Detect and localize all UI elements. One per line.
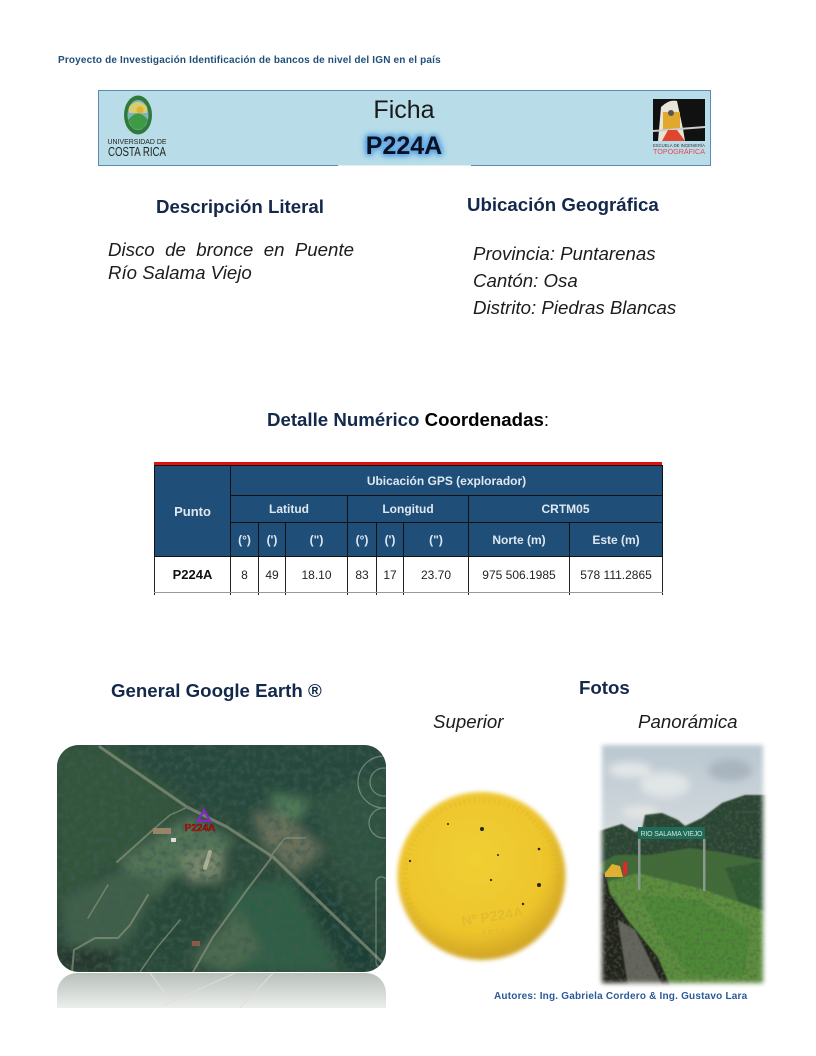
- heading: Ficha: Ficha: [373, 96, 435, 124]
- heading: Ubicación Geográfica: Ubicación Geográfica: [467, 194, 659, 215]
- heading: numeric detail: Detalle Numérico Coordenadas:: [267, 409, 549, 430]
- caption: Superior: Superior: [433, 711, 504, 732]
- table header rows: ("): [310, 532, 323, 546]
- heading: P224A: P224A: [366, 132, 442, 160]
- table data row: 17: [383, 568, 397, 582]
- authors credit: Autores: Ing. Gabriela Cordero & Ing. Gustavo Lara: [494, 991, 747, 1002]
- table data row: 83: [355, 568, 369, 582]
- table header rows: Punto: [174, 504, 211, 518]
- table header rows: (°): [238, 532, 251, 546]
- text block: literal description: [108, 239, 354, 283]
- map control rings: [357, 756, 386, 967]
- table data row: 23.70: [421, 568, 451, 582]
- text block: geographic location: [473, 243, 676, 318]
- table header rows: Norte (m): [492, 532, 546, 546]
- table header rows: ('): [267, 532, 277, 546]
- table header rows: ("): [429, 532, 443, 546]
- road sign: [638, 827, 706, 891]
- icon: Escuela de Topografía logo: TOPOGRÁFICA: [653, 147, 705, 156]
- text block: geographic location: Distrito: Piedras Blancas: [473, 297, 676, 318]
- title banner: [98, 90, 711, 166]
- running header: Proyecto de Investigación Identificación de bancos de nivel del IGN en el país: [58, 55, 441, 66]
- map marker P224A: [185, 810, 215, 834]
- photo: panoramic roadside view: [598, 742, 767, 987]
- table data row: 578 111.2865: [580, 568, 652, 582]
- icon: Escuela de Topografía logo: [653, 99, 705, 156]
- table header rows: ('): [385, 532, 395, 546]
- photo: bronze disc top view: 1974: [481, 927, 507, 941]
- table data row: 49: [265, 568, 279, 582]
- icon: Universidad de Costa Rica logo: [108, 96, 166, 159]
- table header rows: Este (m): [592, 532, 640, 546]
- table header rows: CRTM05: [541, 502, 590, 516]
- coordinates table: [154, 462, 662, 595]
- barrier and red figure: [605, 864, 623, 877]
- heading: General Google Earth: General Google Earth ®: [111, 680, 322, 701]
- heading: Descripción Literal: Descripción Literal: [156, 196, 324, 217]
- photo: bronze disc top view: [394, 788, 569, 964]
- farm buildings: [153, 828, 171, 834]
- text block: literal description: Río Salama Viejo: [108, 262, 252, 282]
- table data row: 975 506.1985: [482, 568, 556, 582]
- satellite map image: [57, 745, 386, 1008]
- table header rows: (°): [356, 532, 368, 546]
- map marker P224A: P224A: [185, 823, 215, 834]
- road sign: RIO SALAMA VIEJO: [640, 831, 703, 838]
- caption: Panorámica: Panorámica: [638, 711, 738, 732]
- table header rows: Latitud: [269, 502, 309, 516]
- heading: Fotos: Fotos: [579, 677, 630, 698]
- roads: [72, 747, 383, 972]
- photo: bronze disc top view: Nº P224A: [460, 903, 524, 929]
- text block: geographic location: Provincia: Puntarenas: [473, 243, 656, 264]
- table data row: P224A: [173, 567, 212, 582]
- table header rows: [155, 466, 662, 556]
- map reflection: [57, 972, 386, 1008]
- text block: literal description: Disco de bronce en Puente: [108, 239, 354, 260]
- table header rows: Longitud: [382, 502, 434, 516]
- table data row: 18.10: [301, 568, 332, 582]
- icon: Escuela de Topografía logo: ESCUELA DE INGENIERÍA: [653, 142, 705, 148]
- text block: geographic location: Cantón: Osa: [473, 270, 578, 291]
- table data row: [173, 567, 652, 582]
- table data row: 8: [241, 568, 248, 582]
- table header rows: Ubicación GPS (explorador): [367, 474, 526, 488]
